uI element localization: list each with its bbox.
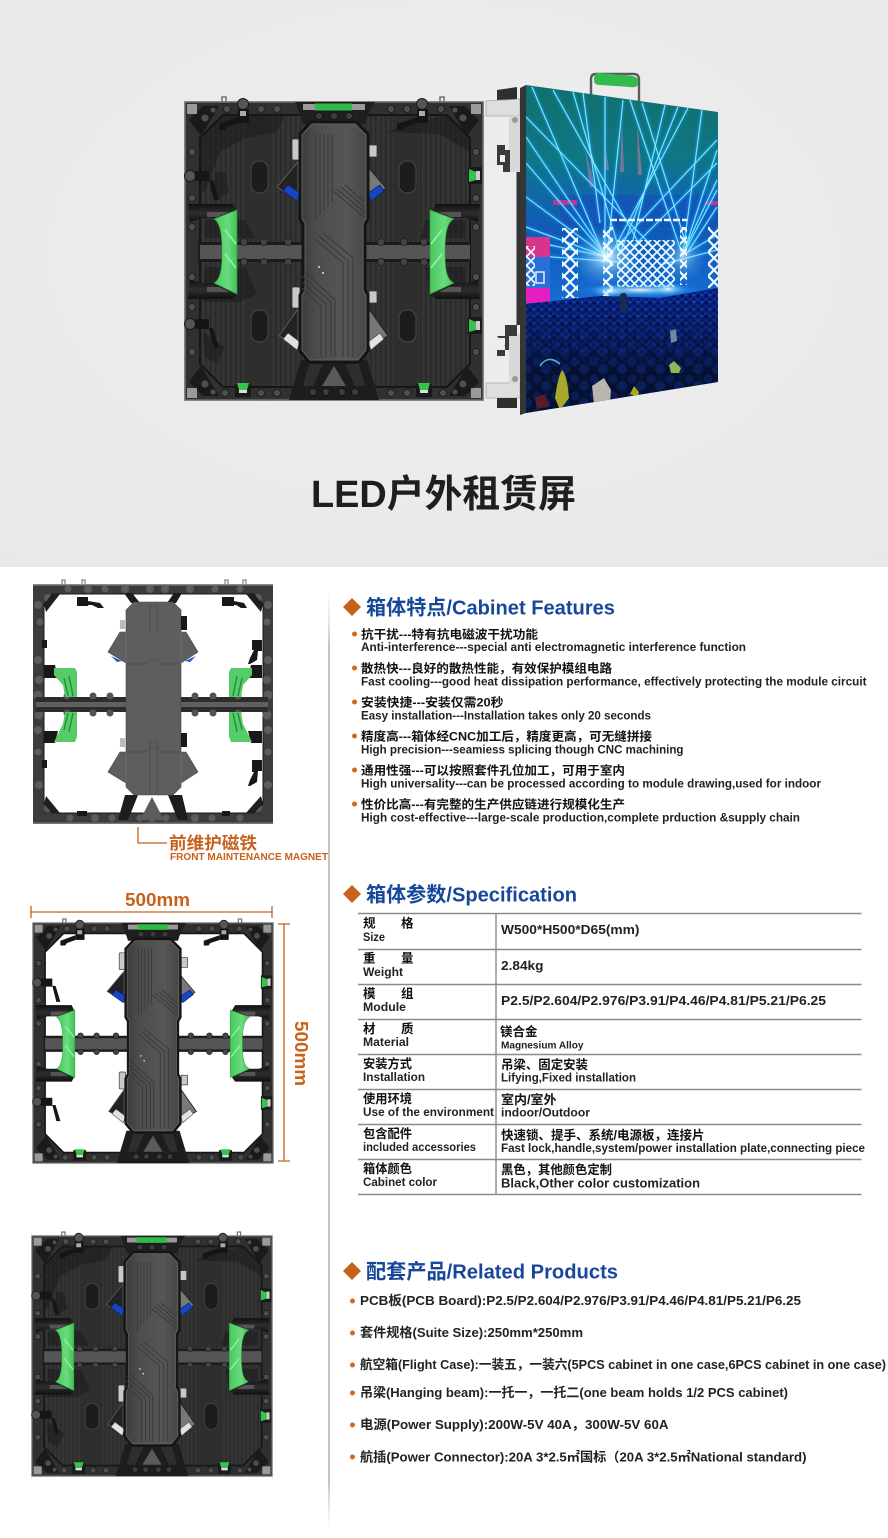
magenta side screen [526,237,550,257]
stage lights [576,231,638,282]
front view cabinet drawing [33,580,273,824]
heading: 配套产品/Related Products [366,1260,618,1284]
spec table: 箱体颜色 [363,1161,412,1176]
product list: 套件规格(Suite Size):250mm*250mm [360,1325,583,1340]
bullet list [352,626,867,824]
bullet list: Easy installation---Installation takes only 20 seconds [361,710,651,722]
crowd [526,288,718,415]
struts [118,593,188,820]
spec table: Magnesium Alloy [501,1040,584,1052]
spec table: P2.5/P2.604/P2.976/P3.91/P4.46/P4.81/P5.21/P6.25 [501,993,826,1008]
carry handle [591,73,639,102]
bullet list: Anti-interference---special anti electromagnetic interference function [361,642,746,654]
bullet list: 抗干扰---特有抗电磁波干扰功能 [361,626,538,642]
spec table: Material [363,1037,409,1049]
heading: 箱体特点/Cabinet Features [366,596,615,620]
product list: 吊梁(Hanging beam):一托一，一托二(one beam holds 1/2 PCS cabinet) [360,1385,788,1400]
spec table: Weight [363,967,403,979]
spec table: 安装方式 [363,1056,412,1071]
callout: front maintenance magnet: FRONT MAINTENANCE MAGNET [170,851,329,863]
bullet list: 性价比高---有完整的生产供应链进行规模化生产 [361,796,625,812]
cabinet edge [520,85,526,415]
corner braces [44,594,263,813]
spec table: 量 [401,952,414,966]
cabinet rear photo [32,1232,272,1476]
spec table: 包含配件 [363,1126,412,1141]
spec table: 重 [363,950,376,966]
product list: 航插(Power Connector):20A 3*2.5㎡国标（20A 3*2.5㎡National standard) [360,1450,806,1464]
crossbar [36,697,268,712]
spec table: Size [363,932,385,944]
section: related products [343,1260,886,1464]
height dimension [278,924,311,1161]
spec table: included accessories [363,1142,476,1154]
bullet list: 安装快捷---安装仅需20秒 [361,694,504,710]
spec table: indoor/Outdoor [501,1108,591,1120]
mounting bracket [486,87,520,408]
bullet list: Fast cooling---good heat dissipation performance, effectively protecting the module circuit [361,676,867,688]
callout: front maintenance magnet [138,827,329,863]
spec table: Use of the environment [363,1107,494,1119]
section: cabinet features [343,596,867,824]
spec table: 快速锁、提手、系统/电源板，连接片 [501,1128,704,1142]
frame bosses [34,585,272,822]
product list: PCB板(PCB Board):P2.5/P2.604/P2.976/P3.91/P4.46/P4.81/P5.21/P6.25 [360,1293,801,1308]
bullet list: High cost-effective---large-scale production,complete prduction &supply chain [361,812,800,824]
centre plate [108,602,198,795]
heading: 箱体参数/Specification [366,882,577,906]
hero: cabinet rear view [184,97,483,400]
callout: front maintenance magnet: 前维护磁铁 [169,834,257,853]
spec table: Cabinet color [363,1177,438,1189]
spec table: 使用环境 [363,1091,412,1106]
spec table: 黑色，其他颜色定制 [501,1162,612,1177]
green handles [44,665,262,743]
spec table: 组 [401,986,414,1001]
product list: 电源(Power Supply):200W-5V 40A，300W-5V 60A [360,1417,669,1432]
spec table: 质 [401,1021,414,1036]
section: specification [343,882,865,1195]
spec table: Module [363,1002,406,1014]
laser beams [526,87,717,265]
spec table: Black,Other color customization [501,1176,700,1190]
bullet list: High precision---seamiess splicing though CNC machining [361,744,684,756]
spec table: Fast lock,handle,system/power installation plate,connecting piece [501,1143,865,1155]
spec table: 2.84kg [501,958,544,973]
width dimension [31,890,272,918]
hero: cabinet side view with LED screen [486,73,718,415]
bullet list: 精度高---箱体经CNC加工后，精度更高，可无缝拼接 [361,728,652,744]
spec table: 规 [363,916,376,930]
spec table: 模 [363,986,376,1001]
width dimension: 500mm [125,890,190,910]
title: LED户外租赁屏 [311,474,576,516]
spec table [358,913,865,1195]
spec table: Installation [363,1072,425,1084]
height dimension: 500mm [291,1021,311,1086]
cabinet rear drawing with dimensions [33,919,273,1163]
studs [62,580,246,584]
spec table: 材 [363,1021,376,1036]
product list: 航空箱(Flight Case):一装五，一装六(5PCS cabinet in one case,6PCS cabinet in one case) [360,1357,886,1372]
spec table: 吊梁、固定安装 [501,1057,588,1072]
top banner background [0,0,888,567]
bullet list: High universality---can be processed according to module drawing,used for indoor [361,778,822,790]
small latches [42,597,262,816]
spec table: W500*H500*D65(mm) [501,922,640,937]
bullet list: 通用性强---可以按照套件孔位加工，可用于室内 [361,762,625,778]
bullet list: 散热快---良好的散热性能，有效保护模组电路 [361,660,612,676]
spec table: 室内/室外 [501,1092,557,1107]
spec table: 镁合金 [500,1024,538,1039]
spec table: Lifying,Fixed installation [501,1072,636,1084]
divider line [328,590,330,1530]
screen image: concert lasers [526,85,718,415]
product list [350,1293,886,1464]
spec table: 格 [401,916,414,930]
